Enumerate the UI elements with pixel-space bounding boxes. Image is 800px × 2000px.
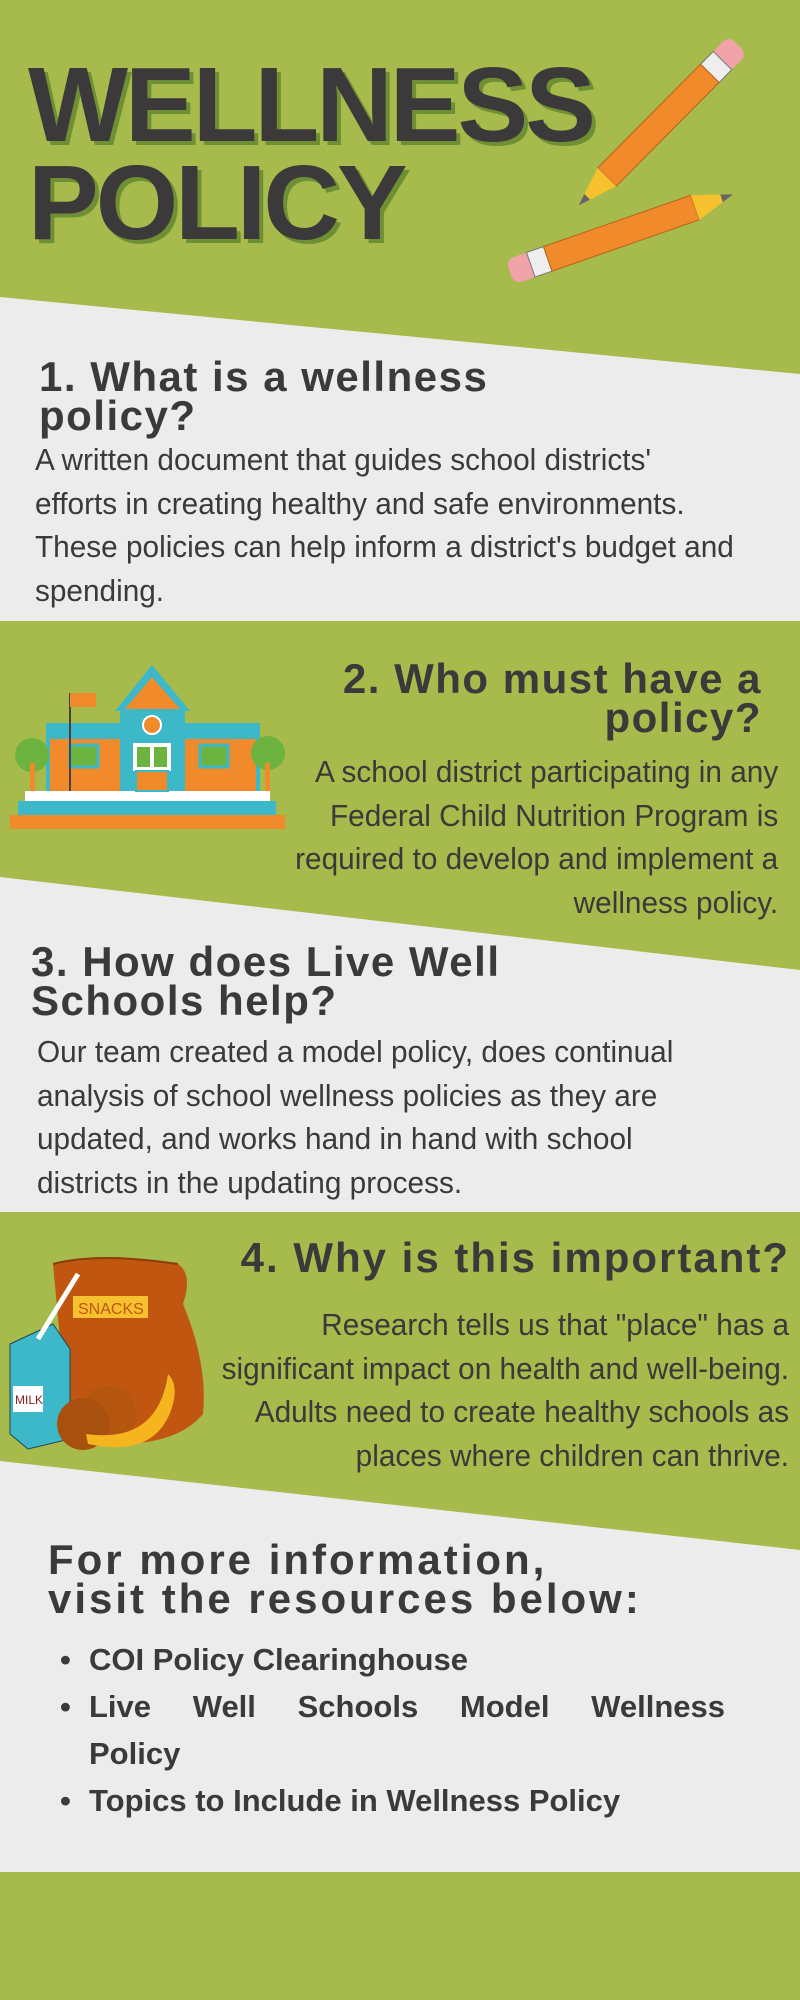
icon: snacks: [10, 1257, 204, 1450]
icon: pencils: [508, 39, 744, 282]
resources list: •: [60, 1642, 71, 1677]
resources list: •: [60, 1783, 71, 1818]
heading 5: [48, 1536, 642, 1622]
heading 2: 2. Who must have a: [343, 655, 762, 702]
text 2: required to develop and implement a: [295, 841, 778, 876]
text 3: [37, 1034, 673, 1200]
text 1: efforts in creating healthy and safe environments.: [35, 486, 685, 520]
heading 4: 4. Why is this important?: [241, 1234, 790, 1281]
text 4: Research tells us that "place" has a: [321, 1307, 789, 1342]
resources list: Topics to Include in Wellness Policy: [89, 1783, 620, 1818]
text 1: [35, 442, 734, 608]
title: WELLNESS: [28, 46, 593, 164]
icon: pencil 2: [506, 182, 737, 284]
text 4: significant impact on health and well-being.: [222, 1350, 789, 1386]
heading 5: visit the resources below:: [48, 1575, 642, 1622]
resources list: Policy: [89, 1736, 180, 1771]
text 1: spending.: [35, 572, 164, 608]
heading 2: [343, 655, 762, 741]
text 3: districts in the updating process.: [37, 1164, 462, 1200]
heading 3: Schools help?: [31, 977, 338, 1024]
text 2: Federal Child Nutrition Program is: [330, 798, 778, 832]
text 2: A school district participating in any: [315, 754, 778, 789]
title: [28, 46, 596, 262]
text 3: updated, and works hand in hand with school: [37, 1121, 633, 1156]
heading 1: policy?: [39, 392, 197, 439]
heading 3: 3. How does Live Well: [31, 938, 501, 985]
resources list: Live Well Schools Model Wellness: [89, 1689, 725, 1724]
heading 3: [31, 938, 501, 1024]
icon: pencil 1: [570, 36, 747, 215]
resources list: •: [60, 1689, 71, 1724]
text 4: [222, 1307, 790, 1472]
heading 1: [39, 353, 488, 439]
resources list: COI Policy Clearinghouse: [89, 1642, 468, 1677]
heading 2: policy?: [604, 694, 762, 741]
text 4: places where children can thrive.: [356, 1438, 789, 1472]
text 2: [295, 754, 778, 920]
text 1: These policies can help inform a district's budget and: [35, 529, 734, 564]
text 2: wellness policy.: [573, 884, 778, 920]
icon: school: [10, 665, 285, 829]
heading 1: 1. What is a wellness: [39, 353, 488, 400]
text 4: Adults need to create healthy schools as: [255, 1394, 789, 1429]
icon: snacks: SNACKS: [78, 1301, 144, 1318]
heading 5: For more information,: [48, 1536, 547, 1583]
title: POLICY: [28, 144, 405, 262]
text 1: A written document that guides school districts': [35, 442, 651, 477]
resources list: [60, 1642, 725, 1818]
text 3: analysis of school wellness policies as they are: [37, 1078, 657, 1112]
text 3: Our team created a model policy, does continual: [37, 1034, 673, 1069]
icon: snacks: MILK: [15, 1393, 43, 1407]
